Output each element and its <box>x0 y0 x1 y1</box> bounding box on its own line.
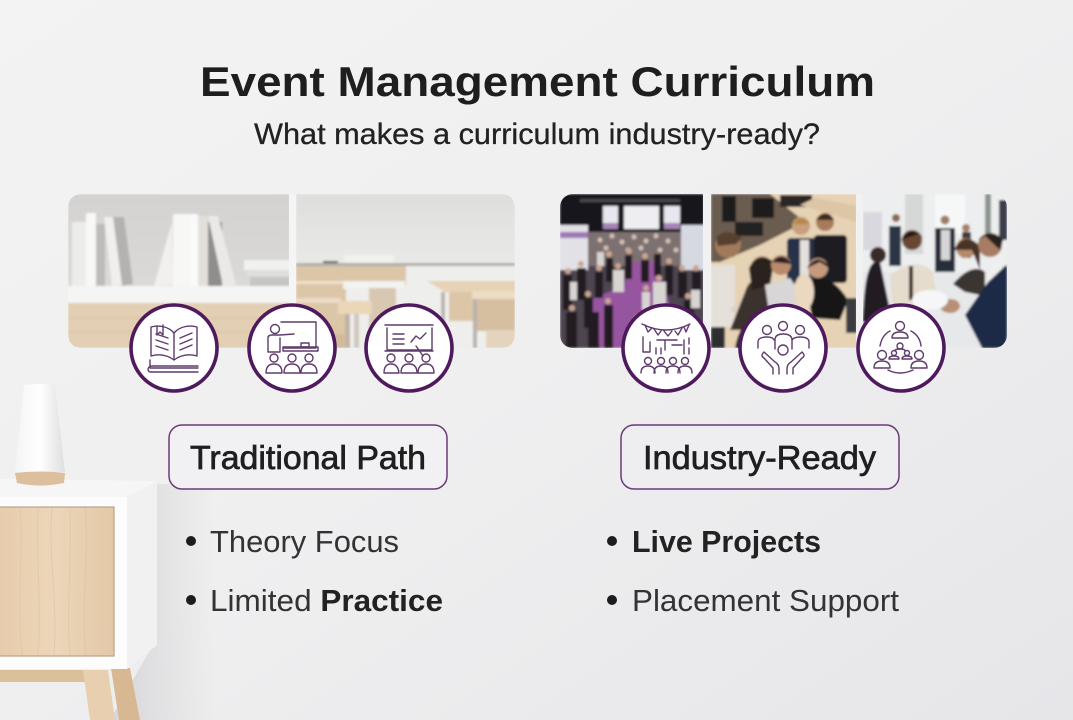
bullet: Theory Focus: Theory Focus <box>210 524 399 559</box>
photo: bookshelf <box>68 194 290 348</box>
photo: event hall crowd <box>560 194 704 348</box>
cabinet legs <box>0 668 140 720</box>
panel heading: Industry-Ready <box>621 425 899 489</box>
photo: classroom <box>296 194 515 348</box>
photo: team collaboration <box>711 194 857 348</box>
title: Event Management Curriculum <box>200 58 875 105</box>
vase <box>15 384 65 486</box>
cabinet wood door <box>0 507 114 656</box>
panel heading: Traditional Path <box>169 425 447 489</box>
subtitle: What makes a curriculum industry-ready? <box>254 118 820 151</box>
photo: networking table <box>863 194 1007 348</box>
icon: team celebrating <box>740 305 826 391</box>
icon: networking circle <box>858 305 944 391</box>
bullet: Placement Support: Placement Support <box>632 583 899 618</box>
panel heading: Traditional Path: Traditional Path <box>190 439 426 476</box>
cabinet body <box>0 479 157 669</box>
bullet: Limited Practice: Limited Practice <box>210 583 443 618</box>
people <box>711 265 735 327</box>
icon: teacher at board <box>249 305 335 391</box>
panel: industry-ready photos <box>560 190 1007 350</box>
icon: open book <box>131 305 217 391</box>
furniture: side cabinet with vase <box>0 384 215 720</box>
icon: festive event <box>623 305 709 391</box>
panel: traditional path photos <box>68 190 515 350</box>
icon: presentation with chart <box>366 305 452 391</box>
panel heading: Industry-Ready: Industry-Ready <box>643 439 877 476</box>
bullet: Live Projects: Live Projects <box>632 524 821 559</box>
